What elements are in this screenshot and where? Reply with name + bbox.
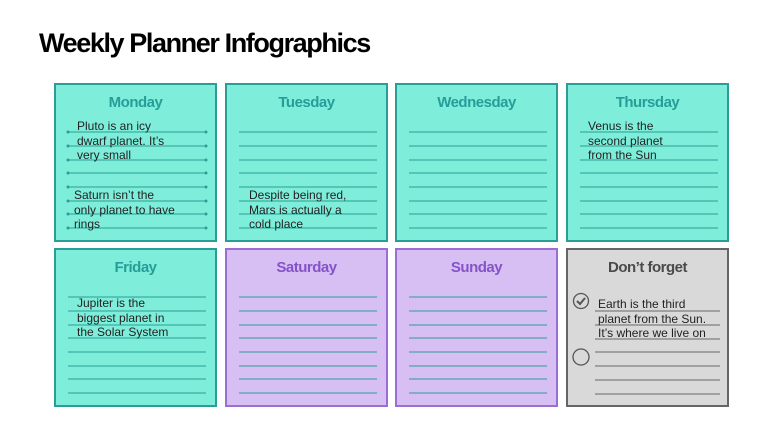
- panel: Thursday: [566, 83, 729, 242]
- text: Monday notes 2: [74, 188, 175, 231]
- panel: Saturday: Saturday: [276, 259, 337, 276]
- text: Friday note: Jupiter is the: [77, 296, 145, 310]
- text: Monday notes 2: only planet to have: [74, 202, 175, 216]
- panel: Monday: Monday: [109, 94, 162, 111]
- title: Weekly Planner Infographics: [39, 28, 370, 58]
- text: Friday note: [77, 296, 168, 339]
- text: Tuesday note: Mars is actually a: [249, 202, 342, 216]
- text: Tuesday note: [249, 188, 346, 231]
- text: Friday note: the Solar System: [77, 325, 168, 339]
- text: reminder: It’s where we live on: [598, 326, 706, 340]
- panel: Tuesday: [225, 83, 388, 242]
- panel: Don't forget: Don’t forget: [608, 259, 687, 276]
- text: Monday notes: very small: [77, 148, 131, 162]
- panel: Monday: [54, 83, 217, 242]
- text: Thursday note: second planet: [588, 134, 663, 148]
- text: Monday notes 2: Saturn isn’t the: [74, 188, 154, 202]
- text: Thursday note: [588, 119, 663, 162]
- panel: Wednesday: [395, 83, 558, 242]
- panel: Wednesday: Wednesday: [437, 94, 516, 111]
- text: Monday notes: Pluto is an icy: [77, 119, 151, 133]
- text: Monday notes 2: rings: [74, 217, 100, 231]
- panel: Friday: [54, 248, 217, 407]
- panel: Saturday: [225, 248, 388, 407]
- text: reminder: planet from the Sun.: [598, 312, 706, 326]
- panel: Sunday: [395, 248, 558, 407]
- text: Tuesday note: cold place: [249, 217, 303, 231]
- text: Friday note: biggest planet in: [77, 310, 164, 324]
- icon: checked circle: [574, 294, 588, 308]
- panel: Don't forget: [566, 248, 729, 407]
- panel: Thursday: Thursday: [616, 94, 679, 111]
- text: Monday notes: [77, 119, 164, 162]
- panel: Friday: Friday: [114, 259, 156, 276]
- text: Thursday note: from the Sun: [588, 148, 657, 162]
- text: Thursday note: Venus is the: [588, 119, 653, 133]
- panel: Tuesday: Tuesday: [278, 94, 335, 111]
- panel: Sunday: Sunday: [451, 259, 502, 276]
- text: Tuesday note: Despite being red,: [249, 188, 346, 202]
- text: reminder: Earth is the third: [598, 297, 685, 311]
- text: Monday notes: dwarf planet. It’s: [77, 134, 164, 148]
- icon: empty circle: [573, 349, 589, 365]
- text: reminder: [598, 297, 706, 340]
